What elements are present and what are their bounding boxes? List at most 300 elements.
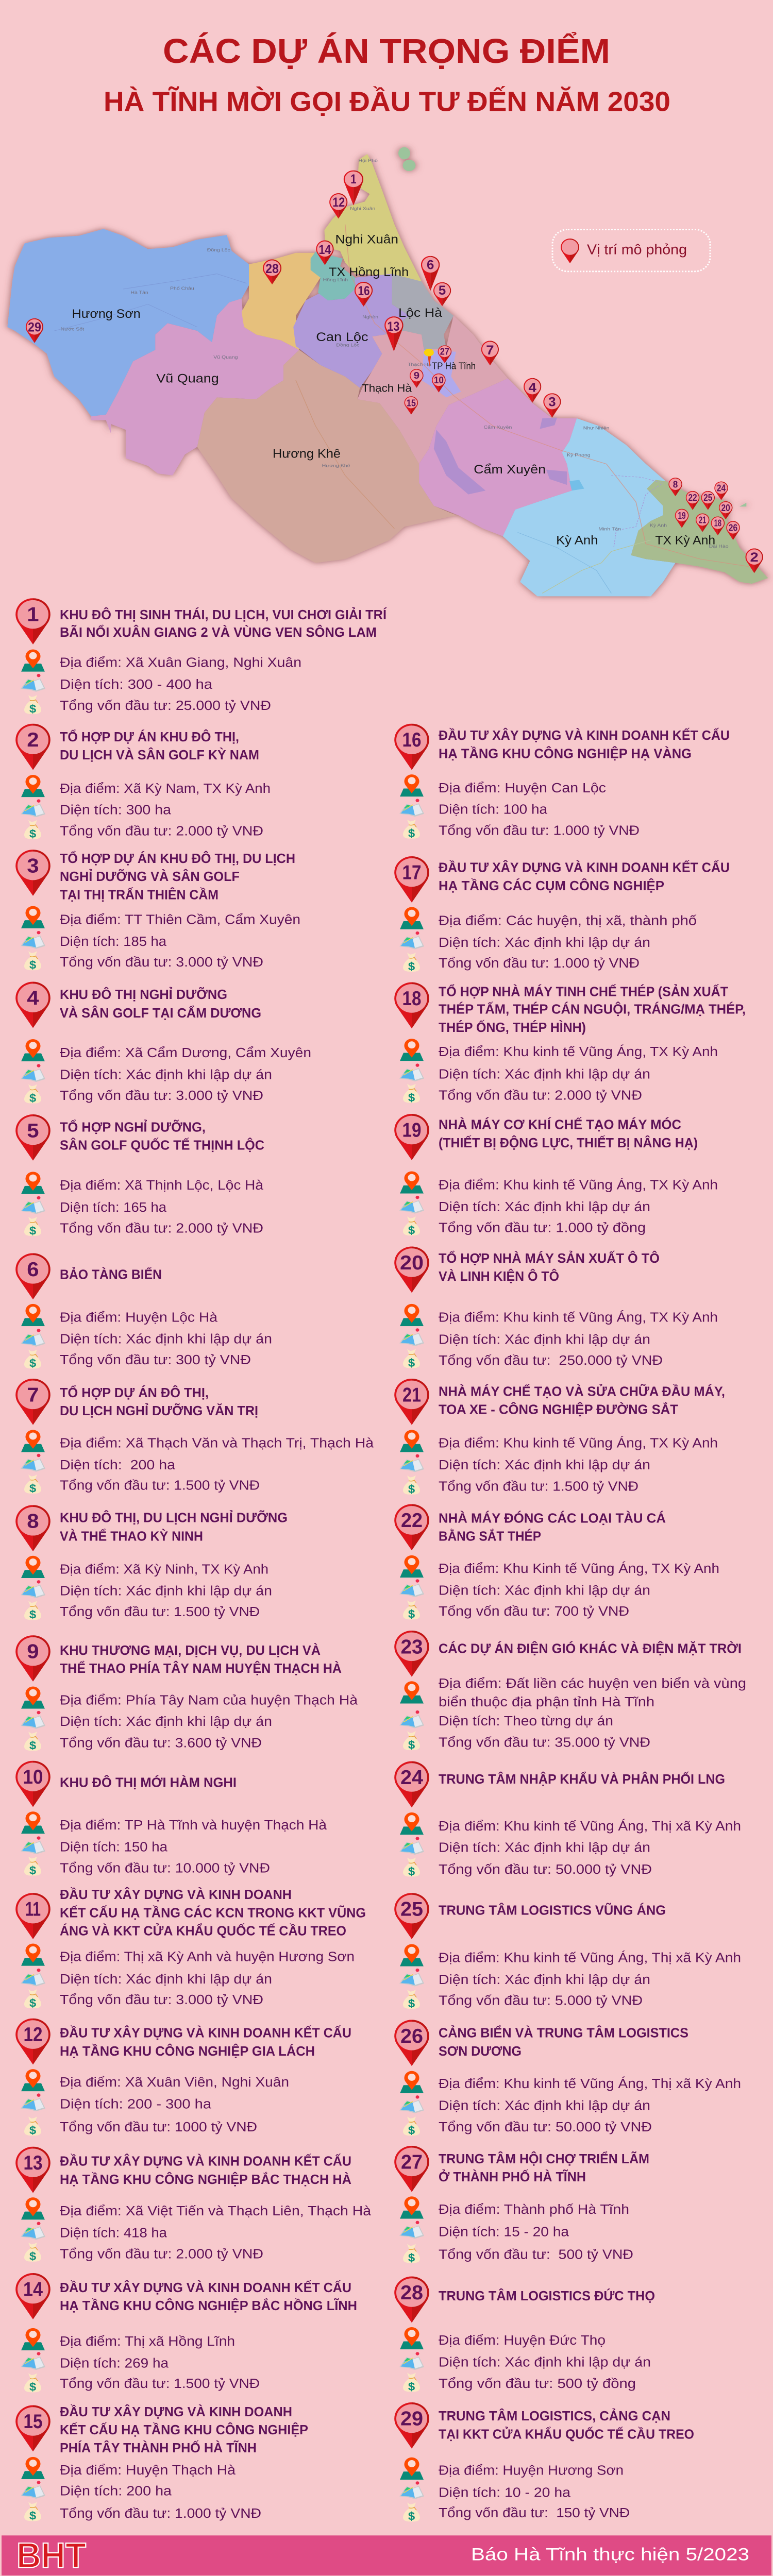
details 15: $ (29, 2510, 36, 2522)
small place names on map: Kỳ Anh (650, 523, 667, 528)
details 5: Tổng vốn đầu tư: 2.000 tỷ VNĐ (60, 1221, 263, 1235)
project 27 (394, 2146, 649, 2264)
details 13: Địa điểm: Xã Việt Tiến và Thạch Liên, Thạch Hà (60, 2204, 371, 2218)
region: Đức Thọ (242, 253, 321, 350)
details 27: Địa điểm: Thành phố Hà Tĩnh (439, 2202, 629, 2217)
small place names on map: Đồng Lộc (336, 343, 360, 347)
map pin 28 (263, 259, 281, 284)
map pin 27 (438, 345, 451, 363)
details 25: Diện tích: Xác định khi lập dự án (439, 1972, 650, 1987)
map pin 20: 20 (721, 503, 730, 513)
details 12: Diện tích: 200 - 300 ha (60, 2097, 211, 2111)
title 24: TRUNG TÂM NHẬP KHẨU VÀ PHÂN PHỐI LNG (439, 1771, 725, 1787)
details 28: $ (408, 2380, 415, 2393)
details 4: $ (29, 1092, 36, 1105)
details 21 (399, 1430, 718, 1496)
pin 2 (15, 724, 51, 770)
map pin 13 (384, 316, 404, 351)
map pin 9: 9 (414, 370, 419, 381)
details 22: Địa điểm: Khu Kinh tế Vũng Áng, TX Kỳ Anh (439, 1561, 719, 1576)
map pin 25: 25 (703, 493, 712, 503)
pin 10: 10 (23, 1765, 43, 1788)
details 2: Địa điểm: Xã Kỳ Nam, TX Kỳ Anh (60, 781, 271, 796)
details 24: $ (408, 1865, 415, 1878)
title 3 (60, 851, 295, 902)
title 26: CẢNG BIỂN VÀ TRUNG TÂM LOGISTICS (439, 2025, 688, 2040)
details 19: Địa điểm: Khu kinh tế Vũng Áng, TX Kỳ Anh (439, 1177, 718, 1192)
pin 23: 23 (401, 1635, 423, 1658)
details 7: Địa điểm: Xã Thạch Văn và Thạch Trị, Thạch Hà (60, 1435, 374, 1450)
details 2: Diện tích: 300 ha (60, 802, 171, 817)
details 19 (399, 1171, 718, 1236)
map pin 4 (524, 378, 541, 403)
pin 7 (15, 1379, 51, 1425)
details 1 (21, 650, 301, 715)
details 10: $ (29, 1864, 36, 1877)
title 19 (439, 1117, 698, 1150)
title 1: BÃI NỔI XUÂN GIANG 2 VÀ VÙNG VEN SÔNG LAM (60, 624, 377, 640)
details 11: Diện tích: Xác định khi lập dự án (60, 1972, 272, 1987)
details 14 (21, 2328, 260, 2394)
map pin 8: 8 (673, 479, 678, 490)
details 21: Tổng vốn đầu tư: 1.500 tỷ VNĐ (439, 1479, 638, 1494)
pin 10 (15, 1761, 51, 1807)
title 13: ĐẦU TƯ XÂY DỰNG VÀ KINH DOANH KẾT CẤU (60, 2154, 351, 2168)
details 26: Địa điểm: Khu kinh tế Vũng Áng, Thị xã Kỳ Anh (439, 2076, 741, 2091)
details 21: Địa điểm: Khu kinh tế Vũng Áng, TX Kỳ Anh (439, 1435, 718, 1450)
pin 24: 24 (400, 1766, 423, 1789)
details 7 (21, 1430, 374, 1495)
details 10: Diện tích: 150 ha (60, 1839, 167, 1854)
pin 9: 9 (27, 1640, 39, 1663)
details 2: Tổng vốn đầu tư: 2.000 tỷ VNĐ (60, 823, 263, 838)
details 16: Diện tích: 100 ha (439, 802, 547, 817)
details 12: $ (29, 2124, 36, 2137)
details 23 (399, 1676, 746, 1751)
title 2 (60, 729, 259, 762)
project 12 (15, 2019, 351, 2137)
map pin 22: 22 (688, 493, 697, 503)
details 16 (399, 774, 640, 840)
title 14: HẠ TẦNG KHU CÔNG NGHIỆP BẮC HỒNG LĨNH (60, 2298, 357, 2313)
details 13: Diện tích: 418 ha (60, 2226, 167, 2240)
pin 11: 11 (25, 1897, 41, 1920)
project 28 (394, 2277, 655, 2393)
title 12: ĐẦU TƯ XÂY DỰNG VÀ KINH DOANH KẾT CẤU (60, 2025, 351, 2040)
details 12: Địa điểm: Xã Xuân Viên, Nghi Xuân (60, 2075, 289, 2090)
region: Cẩm Xuyên (419, 378, 577, 536)
details 15: Tổng vốn đầu tư: 1.000 tỷ VNĐ (60, 2506, 261, 2521)
map pin 24 (714, 481, 728, 500)
title 22: BẰNG SẮT THÉP (439, 1529, 541, 1544)
title 7: TỔ HỢP DỰ ÁN ĐÔ THỊ, (60, 1385, 209, 1400)
map of Hà Tĩnh province (7, 147, 768, 596)
pin 24 (394, 1761, 429, 1807)
details 17: $ (408, 960, 415, 973)
details 23: biển thuộc địa phận tỉnh Hà Tĩnh (439, 1694, 654, 1709)
map pin 27: 27 (440, 346, 449, 357)
pin 3 (15, 850, 51, 896)
title 17 (439, 860, 730, 893)
title 3: TỔ HỢP DỰ ÁN KHU ĐÔ THỊ, DU LỊCH (60, 851, 295, 866)
pin 17 (394, 856, 429, 903)
project 21 (394, 1379, 725, 1496)
title 4: VÀ SÂN GOLF TẠI CẨM DƯƠNG (60, 1005, 261, 1021)
details 7: $ (29, 1482, 36, 1495)
map pin 26 (726, 521, 740, 540)
pin 5: 5 (27, 1119, 39, 1142)
map pin 16 (355, 282, 373, 307)
details 20: $ (408, 1357, 415, 1369)
title 10: KHU ĐÔ THỊ MỚI HÀM NGHI (60, 1774, 237, 1790)
details 13: $ (29, 2250, 36, 2263)
details 21: Diện tích: Xác định khi lập dự án (439, 1458, 650, 1472)
details 23: Diện tích: Theo từng dự án (439, 1714, 613, 1728)
map pin 10 (432, 374, 446, 393)
map pin 29: 29 (28, 320, 41, 335)
footer credit: Báo Hà Tĩnh thực hiện 5/2023 (471, 2545, 749, 2564)
label: Nghi Xuân: Nghi Xuân (335, 232, 398, 246)
details 2: $ (29, 827, 36, 840)
small place names on map: Đại Hào (709, 544, 729, 549)
details 10: Tổng vốn đầu tư: 10.000 tỷ VNĐ (60, 1860, 270, 1875)
details 19: Diện tích: Xác định khi lập dự án (439, 1199, 650, 1214)
project 1 (15, 598, 387, 715)
details 17: Địa điểm: Các huyện, thị xã, thành phố (439, 913, 697, 928)
title 5: SÂN GOLF QUỐC TẾ THỊNH LỘC (60, 1137, 264, 1153)
details 18: Địa điểm: Khu kinh tế Vũng Áng, TX Kỳ Anh (439, 1044, 718, 1059)
map roads and lakes (54, 225, 749, 593)
pin 2: 2 (27, 728, 39, 751)
title 2: TỔ HỢP DỰ ÁN KHU ĐÔ THỊ, (60, 729, 239, 744)
map pin 19: 19 (678, 510, 686, 521)
small place names on map: Vũ Quang (213, 354, 238, 360)
pin 8: 8 (27, 1510, 39, 1532)
project 15 (15, 2404, 308, 2522)
details 8: Địa điểm: Xã Kỳ Ninh, TX Kỳ Anh (60, 1562, 268, 1577)
details 16: Địa điểm: Huyện Can Lộc (439, 781, 606, 795)
title 29 (439, 2408, 694, 2442)
title 5 (60, 1118, 264, 1153)
title 29: TRUNG TÂM LOGISTICS, CẢNG CẠN (439, 2408, 670, 2424)
map pin 2: 2 (750, 551, 759, 565)
details 16: Tổng vốn đầu tư: 1.000 tỷ VNĐ (439, 823, 640, 838)
title 19: NHÀ MÁY CƠ KHÍ CHẾ TẠO MÁY MÓC (439, 1117, 681, 1132)
pin 15 (15, 2405, 51, 2451)
pin 1 (15, 598, 51, 645)
pin 7: 7 (27, 1383, 39, 1406)
details 9: Diện tích: Xác định khi lập dự án (60, 1714, 272, 1729)
details 17 (399, 907, 697, 973)
title 8: VÀ THỂ THAO KỲ NINH (60, 1529, 203, 1544)
title 15: PHÍA TÂY THÀNH PHỐ HÀ TĨNH (60, 2439, 257, 2455)
title 22: NHÀ MÁY ĐÓNG CÁC LOẠI TÀU CÁ (439, 1511, 666, 1526)
pin 25 (394, 1893, 429, 1939)
region: Kỳ Anh (503, 418, 676, 596)
map pin 1 (344, 171, 363, 206)
details 9: Tổng vốn đầu tư: 3.600 tỷ VNĐ (60, 1736, 262, 1750)
project 2 (15, 724, 271, 840)
map pin 5: 5 (439, 283, 446, 298)
pin 27 (394, 2146, 429, 2192)
small place names on map: Kỳ Phong (567, 452, 591, 457)
details 4: Tổng vốn đầu tư: 3.000 tỷ VNĐ (60, 1088, 263, 1103)
small place names on map: Nghèn (362, 314, 378, 319)
details 4 (21, 1039, 311, 1105)
details 6: Diện tích: Xác định khi lập dự án (60, 1331, 272, 1346)
title 12: HẠ TẦNG KHU CÔNG NGHIỆP GIA LÁCH (60, 2043, 315, 2059)
title 16: HẠ TẦNG KHU CÔNG NGHIỆP HẠ VÀNG (439, 745, 692, 761)
details 24: Diện tích: Xác định khi lập dự án (439, 1840, 650, 1855)
map pin 7: 7 (486, 343, 494, 358)
details 14: Diện tích: 269 ha (60, 2355, 169, 2370)
label: Can Lộc: Can Lộc (316, 330, 368, 344)
pin 12: 12 (23, 2023, 42, 2046)
pin 20 (394, 1246, 429, 1293)
pin 14 (15, 2273, 51, 2319)
subtitle: HÀ TĨNH MỜI GỌI ĐẦU TƯ ĐẾN NĂM 2030 (104, 86, 670, 117)
pin 25: 25 (400, 1897, 423, 1920)
details 15 (21, 2457, 261, 2522)
details 17: Tổng vốn đầu tư: 1.000 tỷ VNĐ (439, 956, 640, 971)
map pin 8 (668, 478, 682, 496)
details 11: $ (29, 1996, 36, 2009)
details 14: Tổng vốn đầu tư: 1.500 tỷ VNĐ (60, 2376, 260, 2391)
title 15: ĐẦU TƯ XÂY DỰNG VÀ KINH DOANH (60, 2404, 292, 2419)
project 17 (394, 856, 730, 973)
small place names on map: Hồng Lĩnh (323, 277, 348, 282)
pin 29: 29 (400, 2407, 423, 2430)
details 29 (399, 2458, 630, 2522)
map pin 14: 14 (318, 243, 331, 257)
details 16: $ (408, 827, 415, 840)
footer logo: BHT: BHT (16, 2536, 86, 2575)
title 8 (60, 1510, 288, 1544)
title 29: TẠI KKT CỬA KHẨU QUỐC TẾ CẦU TREO (439, 2426, 694, 2442)
details 10 (21, 1811, 327, 1877)
small place names on map: Nghi Xuân (350, 206, 375, 211)
pin 26: 26 (400, 2024, 423, 2047)
details 3: Diện tích: 185 ha (60, 934, 166, 949)
details 19: $ (408, 1224, 415, 1236)
label: Cẩm Xuyên: Cẩm Xuyên (474, 462, 546, 476)
details 14: $ (29, 2381, 36, 2394)
map pin 19 (675, 509, 688, 528)
title 11: KẾT CẤU HẠ TẦNG CÁC KCN TRONG KKT VŨNG (60, 1905, 366, 1920)
details 23: $ (408, 1738, 415, 1751)
details 8 (21, 1556, 272, 1621)
title 2: DU LỊCH VÀ SÂN GOLF KỲ NAM (60, 747, 259, 762)
details 7: Diện tích: 200 ha (60, 1458, 175, 1472)
label: Lộc Hà: Lộc Hà (398, 305, 442, 319)
title 11: ÁNG VÀ KKT CỬA KHẨU QUỐC TẾ CẦU TREO (60, 1923, 346, 1938)
details 26: $ (408, 2124, 415, 2137)
details 6: Địa điểm: Huyện Lộc Hà (60, 1310, 217, 1325)
title 3: NGHỈ DƯỠNG VÀ SÂN GOLF (60, 868, 240, 884)
details 4: Địa điểm: Xã Cẩm Dương, Cẩm Xuyên (60, 1045, 311, 1060)
region: TX Kỳ Anh (631, 480, 768, 584)
project 5 (15, 1114, 264, 1237)
details 29: Diện tích: 10 - 20 ha (439, 2485, 570, 2500)
details 13 (21, 2197, 371, 2263)
project 23 (394, 1631, 746, 1751)
details 24: Tổng vốn đầu tư: 50.000 tỷ VNĐ (439, 1862, 652, 1877)
title 20: VÀ LINH KIỆN Ô TÔ (439, 1268, 559, 1284)
map pin 9 (410, 369, 424, 388)
project 29 (394, 2402, 694, 2522)
title 13: HẠ TẦNG KHU CÔNG NGHIỆP BẮC THẠCH HÀ (60, 2172, 351, 2187)
details 12 (21, 2069, 289, 2137)
project 11 (15, 1887, 366, 2009)
pin 13: 13 (23, 2151, 42, 2174)
map pin 15 (405, 396, 418, 415)
map pin 14 (316, 241, 334, 265)
pin 6 (15, 1253, 51, 1299)
title 25: TRUNG TÂM LOGISTICS VŨNG ÁNG (439, 1903, 666, 1918)
details 1: Tổng vốn đầu tư: 25.000 tỷ VNĐ (60, 698, 271, 713)
details 5: Địa điểm: Xã Thịnh Lộc, Lộc Hà (60, 1178, 263, 1193)
pin 20: 20 (400, 1251, 424, 1274)
pin 1: 1 (27, 603, 39, 625)
title 17: HẠ TẦNG CÁC CỤM CÔNG NGHIỆP (439, 878, 664, 893)
small place names on map: Minh Tân (598, 527, 621, 531)
title 1 (60, 606, 387, 640)
project 7 (15, 1379, 374, 1495)
pin 4 (15, 982, 51, 1028)
project 26 (394, 2020, 741, 2137)
title 18: TỔ HỢP NHÀ MÁY TINH CHẾ THÉP (SẢN XUẤT (439, 983, 728, 999)
details 11: Địa điểm: Thị xã Kỳ Anh và huyện Hương Sơn (60, 1949, 355, 1964)
title 14 (60, 2280, 357, 2313)
title 18: THÉP ỐNG, THÉP HÌNH) (439, 1019, 586, 1035)
pin 22: 22 (401, 1509, 423, 1532)
title 3: TẠI THỊ TRẤN THIÊN CẦM (60, 887, 219, 902)
map pin 12: 12 (332, 195, 345, 210)
details 25: Tổng vốn đầu tư: 5.000 tỷ VNĐ (439, 1993, 643, 2008)
title 27: Ở THÀNH PHỐ HÀ TĨNH (439, 2168, 586, 2184)
title 7: DU LỊCH NGHỈ DƯỠNG VĂN TRỊ (60, 1402, 258, 1418)
title 26 (439, 2025, 688, 2059)
details 5 (21, 1172, 263, 1237)
map pin 24: 24 (717, 483, 726, 494)
map pin 22 (686, 491, 699, 510)
title 22 (439, 1511, 666, 1544)
label: TP Hà Tĩnh: TP Hà Tĩnh (432, 361, 476, 371)
pin 28: 28 (400, 2281, 423, 2304)
project 10 (15, 1761, 327, 1877)
details 27: Tổng vốn đầu tư: 500 tỷ VNĐ (439, 2247, 633, 2262)
details 8: $ (29, 1608, 36, 1621)
details 22 (399, 1555, 719, 1621)
project 4 (15, 982, 311, 1105)
title 11 (60, 1887, 366, 1938)
title 12 (60, 2025, 351, 2059)
details 26: Diện tích: Xác định khi lập dự án (439, 2098, 650, 2113)
details 3 (21, 906, 300, 971)
map pin 25 (701, 491, 715, 510)
label: TX Hồng Lĩnh: TX Hồng Lĩnh (329, 264, 409, 279)
pin 15: 15 (23, 2410, 42, 2433)
project 6 (15, 1253, 272, 1370)
details 5: Diện tích: 165 ha (60, 1200, 166, 1215)
map pin 3: 3 (548, 395, 556, 409)
details 11 (21, 1944, 355, 2009)
small place names on map: Nước Sốt (61, 327, 85, 331)
details 3: Địa điểm: TT Thiên Cầm, Cẩm Xuyên (60, 912, 300, 927)
region: Can Lộc (293, 274, 409, 388)
region: Nghi Xuân (324, 154, 422, 281)
region: Hương Sơn (7, 229, 249, 416)
map pin 26: 26 (729, 522, 737, 533)
details 18: Tổng vốn đầu tư: 2.000 tỷ VNĐ (439, 1088, 642, 1103)
details 26: Tổng vốn đầu tư: 50.000 tỷ VNĐ (439, 2120, 652, 2134)
title 6: BẢO TÀNG BIỂN (60, 1266, 162, 1282)
details 18: $ (408, 1091, 415, 1104)
title 18: THÉP TẤM, THÉP CÁN NGUỘI, TRÁNG/MẠ THÉP, (439, 1002, 746, 1016)
details 13: Tổng vốn đầu tư: 2.000 tỷ VNĐ (60, 2246, 263, 2261)
title 11: ĐẦU TƯ XÂY DỰNG VÀ KINH DOANH (60, 1887, 292, 1902)
details 21: $ (408, 1483, 415, 1496)
region: Vũ Quang (91, 298, 299, 476)
details 29: Tổng vốn đầu tư: 150 tỷ VNĐ (439, 2505, 630, 2520)
pin 5 (15, 1114, 51, 1161)
pin 17: 17 (402, 861, 422, 884)
pin 3: 3 (27, 854, 39, 877)
title 21: TOA XE - CÔNG NGHIỆP ĐƯỜNG SẮT (439, 1401, 678, 1417)
details 17: Diện tích: Xác định khi lập dự án (439, 935, 650, 950)
title 9: THỂ THAO PHÍA TÂY NAM HUYỆN THẠCH HÀ (60, 1660, 342, 1676)
pin 18: 18 (402, 987, 422, 1010)
title 23: CÁC DỰ ÁN ĐIỆN GIÓ KHÁC VÀ ĐIỆN MẶT TRỜI (439, 1640, 742, 1656)
details 29: $ (408, 2510, 415, 2522)
details 10: Địa điểm: TP Hà Tĩnh và huyện Thạch Hà (60, 1818, 327, 1833)
yellow marker: TP Hà Tĩnh centre (424, 349, 434, 367)
details 20: Tổng vốn đầu tư: 250.000 tỷ VNĐ (439, 1353, 663, 1368)
map pin 13: 13 (387, 320, 399, 334)
details 28: Diện tích: Xác định khi lập dự án (439, 2354, 651, 2369)
project 8 (15, 1505, 288, 1621)
project 14 (15, 2273, 357, 2394)
pin 22 (394, 1504, 429, 1550)
details 19: Tổng vốn đầu tư: 1.000 tỷ đồng (439, 1221, 646, 1235)
details 18 (399, 1039, 718, 1104)
details 25: Địa điểm: Khu kinh tế Vũng Áng, Thị xã Kỳ Anh (439, 1950, 741, 1965)
project 16 (394, 724, 730, 840)
title 18 (439, 983, 746, 1035)
project 9 (15, 1635, 358, 1752)
title 8: KHU ĐÔ THỊ, DU LỊCH NGHỈ DƯỠNG (60, 1510, 288, 1525)
details 15: Diện tích: 200 ha (60, 2483, 172, 2498)
title 7 (60, 1385, 258, 1418)
project 18 (394, 982, 746, 1104)
pin 16: 16 (402, 728, 422, 751)
map pin 18: 18 (714, 518, 721, 529)
details 8: Diện tích: Xác định khi lập dự án (60, 1583, 272, 1598)
map regions (7, 147, 768, 596)
pin 21: 21 (402, 1383, 421, 1406)
small place names on map: Hội Phố (358, 158, 378, 163)
pin 13 (15, 2147, 51, 2193)
map pin 10: 10 (434, 375, 444, 385)
title 15 (60, 2404, 308, 2455)
map pin 3 (543, 393, 561, 417)
details 1: $ (29, 702, 36, 715)
label: Kỳ Anh: Kỳ Anh (556, 533, 598, 547)
details 15: Địa điểm: Huyện Thạch Hà (60, 2463, 236, 2478)
details 7: Tổng vốn đầu tư: 1.500 tỷ VNĐ (60, 1478, 260, 1493)
map pin 2 (746, 548, 763, 573)
title 21: NHÀ MÁY CHẾ TẠO VÀ SỬA CHỮA ĐẦU MÁY, (439, 1383, 725, 1399)
